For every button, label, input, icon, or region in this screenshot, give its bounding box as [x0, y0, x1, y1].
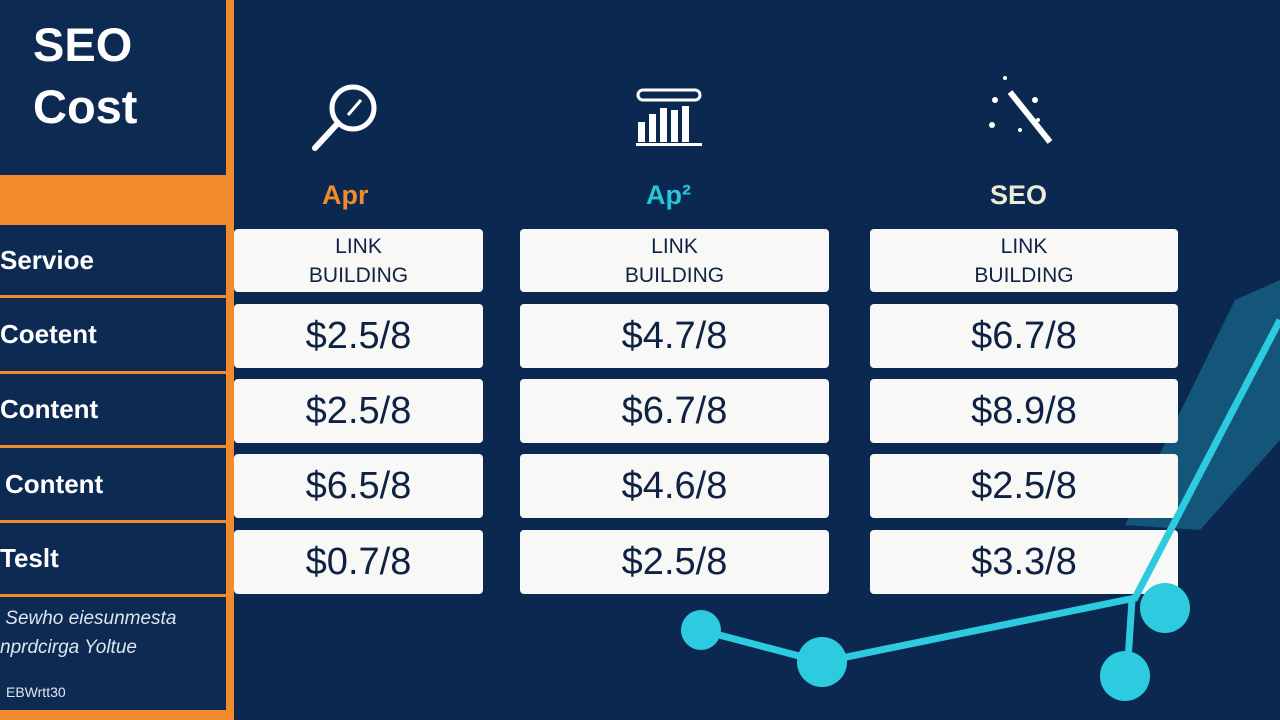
- row label: Service: Servioe: [0, 244, 94, 274]
- text: $2.5/8: [306, 390, 411, 432]
- column header: Ap2: Ap²: [646, 180, 691, 210]
- icon: wand: [989, 76, 1052, 144]
- small footer text: EBWrtt30: [6, 684, 66, 700]
- text: $6.7/8: [622, 390, 727, 432]
- column header: Apr: Apr: [322, 180, 368, 210]
- text: $0.7/8: [306, 540, 411, 582]
- text: LINK: [1001, 234, 1047, 258]
- column header: SEO: SEO: [990, 180, 1047, 210]
- text: LINK: [651, 234, 698, 258]
- left panel: [0, 0, 234, 720]
- row label: Content 2: [0, 448, 226, 523]
- title: Cost: [33, 80, 137, 133]
- title: SEO: [33, 18, 132, 71]
- text: $2.5/8: [306, 314, 411, 356]
- text: BUILDING: [309, 264, 408, 286]
- footnote: Sewho eiesunmesta: [5, 608, 176, 629]
- orange frame: [226, 0, 234, 720]
- text: BUILDING: [625, 264, 724, 286]
- icon: magnifier: [312, 84, 376, 151]
- row label: Coetent: [0, 298, 226, 374]
- text: $2.5/8: [971, 464, 1077, 506]
- text: $2.5/8: [622, 540, 727, 582]
- table column 3: [870, 229, 1178, 594]
- row label: Coetent: Coetent: [0, 319, 97, 349]
- text: LINK: [335, 234, 382, 258]
- text: $6.7/8: [971, 314, 1077, 356]
- row label: Service: [0, 225, 226, 298]
- text: $4.7/8: [622, 314, 727, 356]
- title: [33, 18, 137, 133]
- footnote: nprdcirga Yoltue: [0, 637, 137, 658]
- row label: Content: Content: [0, 394, 98, 424]
- table column 2: [520, 229, 829, 594]
- row label: Content: [0, 374, 226, 448]
- bottom border: [0, 710, 234, 720]
- text: $3.3/8: [971, 540, 1077, 582]
- row label: Content 2: Content: [5, 468, 103, 498]
- text: $4.6/8: [622, 464, 727, 506]
- text: $6.5/8: [306, 464, 411, 506]
- orange header bar: [0, 175, 226, 225]
- text: $8.9/8: [971, 390, 1077, 432]
- footnote: [0, 608, 176, 658]
- text: BUILDING: [974, 264, 1074, 286]
- row label: Teslt: Teslt: [0, 543, 59, 573]
- row label: Teslt: [0, 523, 226, 597]
- icon: bar chart: [636, 88, 702, 146]
- table column 1: [234, 229, 483, 594]
